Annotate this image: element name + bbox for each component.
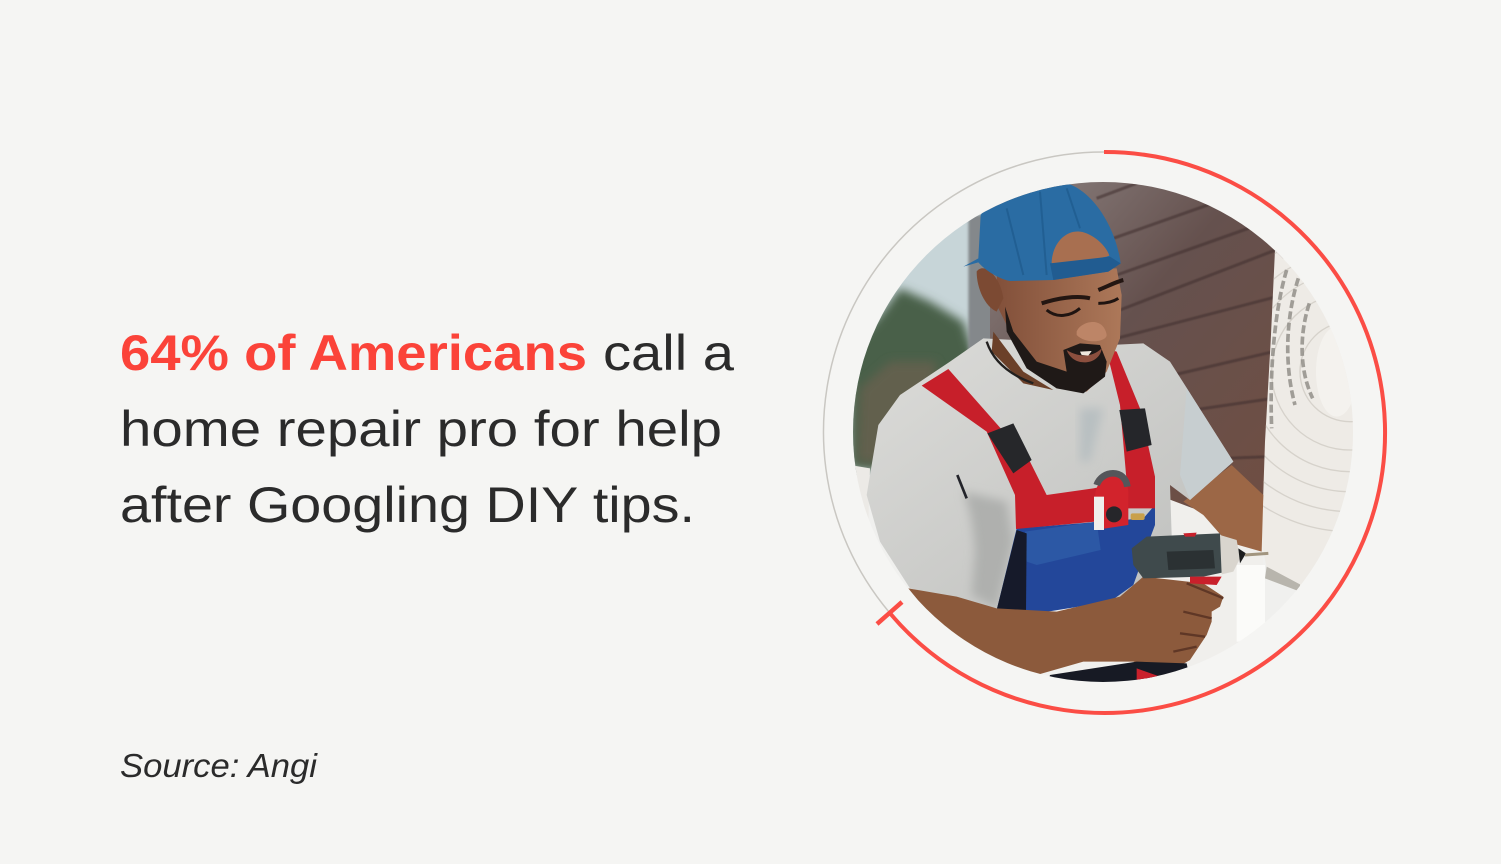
head: beard: [1005, 307, 1107, 393]
ring: tick mark: [877, 602, 902, 624]
headline line 2: home repair pro for help: [120, 401, 722, 457]
overalls: red straps and bib: [922, 348, 1155, 529]
ring: progress indicator: [823, 152, 1385, 713]
collar line: [987, 342, 1033, 383]
head: blue cap: [963, 184, 1121, 281]
overalls: blue bib: [997, 505, 1155, 615]
forearm and hand: [908, 577, 1223, 685]
AC unit: [1263, 250, 1353, 590]
headline: [120, 325, 734, 533]
photo background: sky, trees, wall: [853, 182, 1284, 518]
overalls: left buckle: [987, 423, 1032, 473]
neck: [992, 332, 1053, 390]
right arm reaching to unit: [1183, 465, 1263, 552]
head: smile: [1067, 348, 1102, 362]
source note: Source: Angi: [120, 747, 319, 784]
ring: grey remainder arc: [823, 152, 1104, 612]
headline line 1: call a: [603, 325, 734, 381]
photo: smiling technician drilling an AC unit: [853, 182, 1353, 682]
head: ear: [977, 268, 1003, 312]
headline line 1: 64% of Americans: [120, 325, 587, 381]
headline line 3: after Googling DIY tips.: [120, 477, 695, 533]
AC unit: dark louvres: [1271, 270, 1313, 428]
head: brows and eyes: [1042, 280, 1123, 303]
overalls: right buckle: [1119, 408, 1152, 452]
overalls: [922, 348, 1155, 615]
ring: red arc: [889, 152, 1385, 713]
head: face: [997, 268, 1122, 392]
headline line 1: [120, 325, 734, 381]
head: nose: [1077, 322, 1107, 341]
overalls: pocket tool: [1094, 473, 1145, 530]
drill: [1132, 533, 1268, 585]
AC unit: fan grille rings: [1263, 252, 1353, 532]
t-shirt: [867, 338, 1233, 608]
head: [963, 184, 1123, 393]
